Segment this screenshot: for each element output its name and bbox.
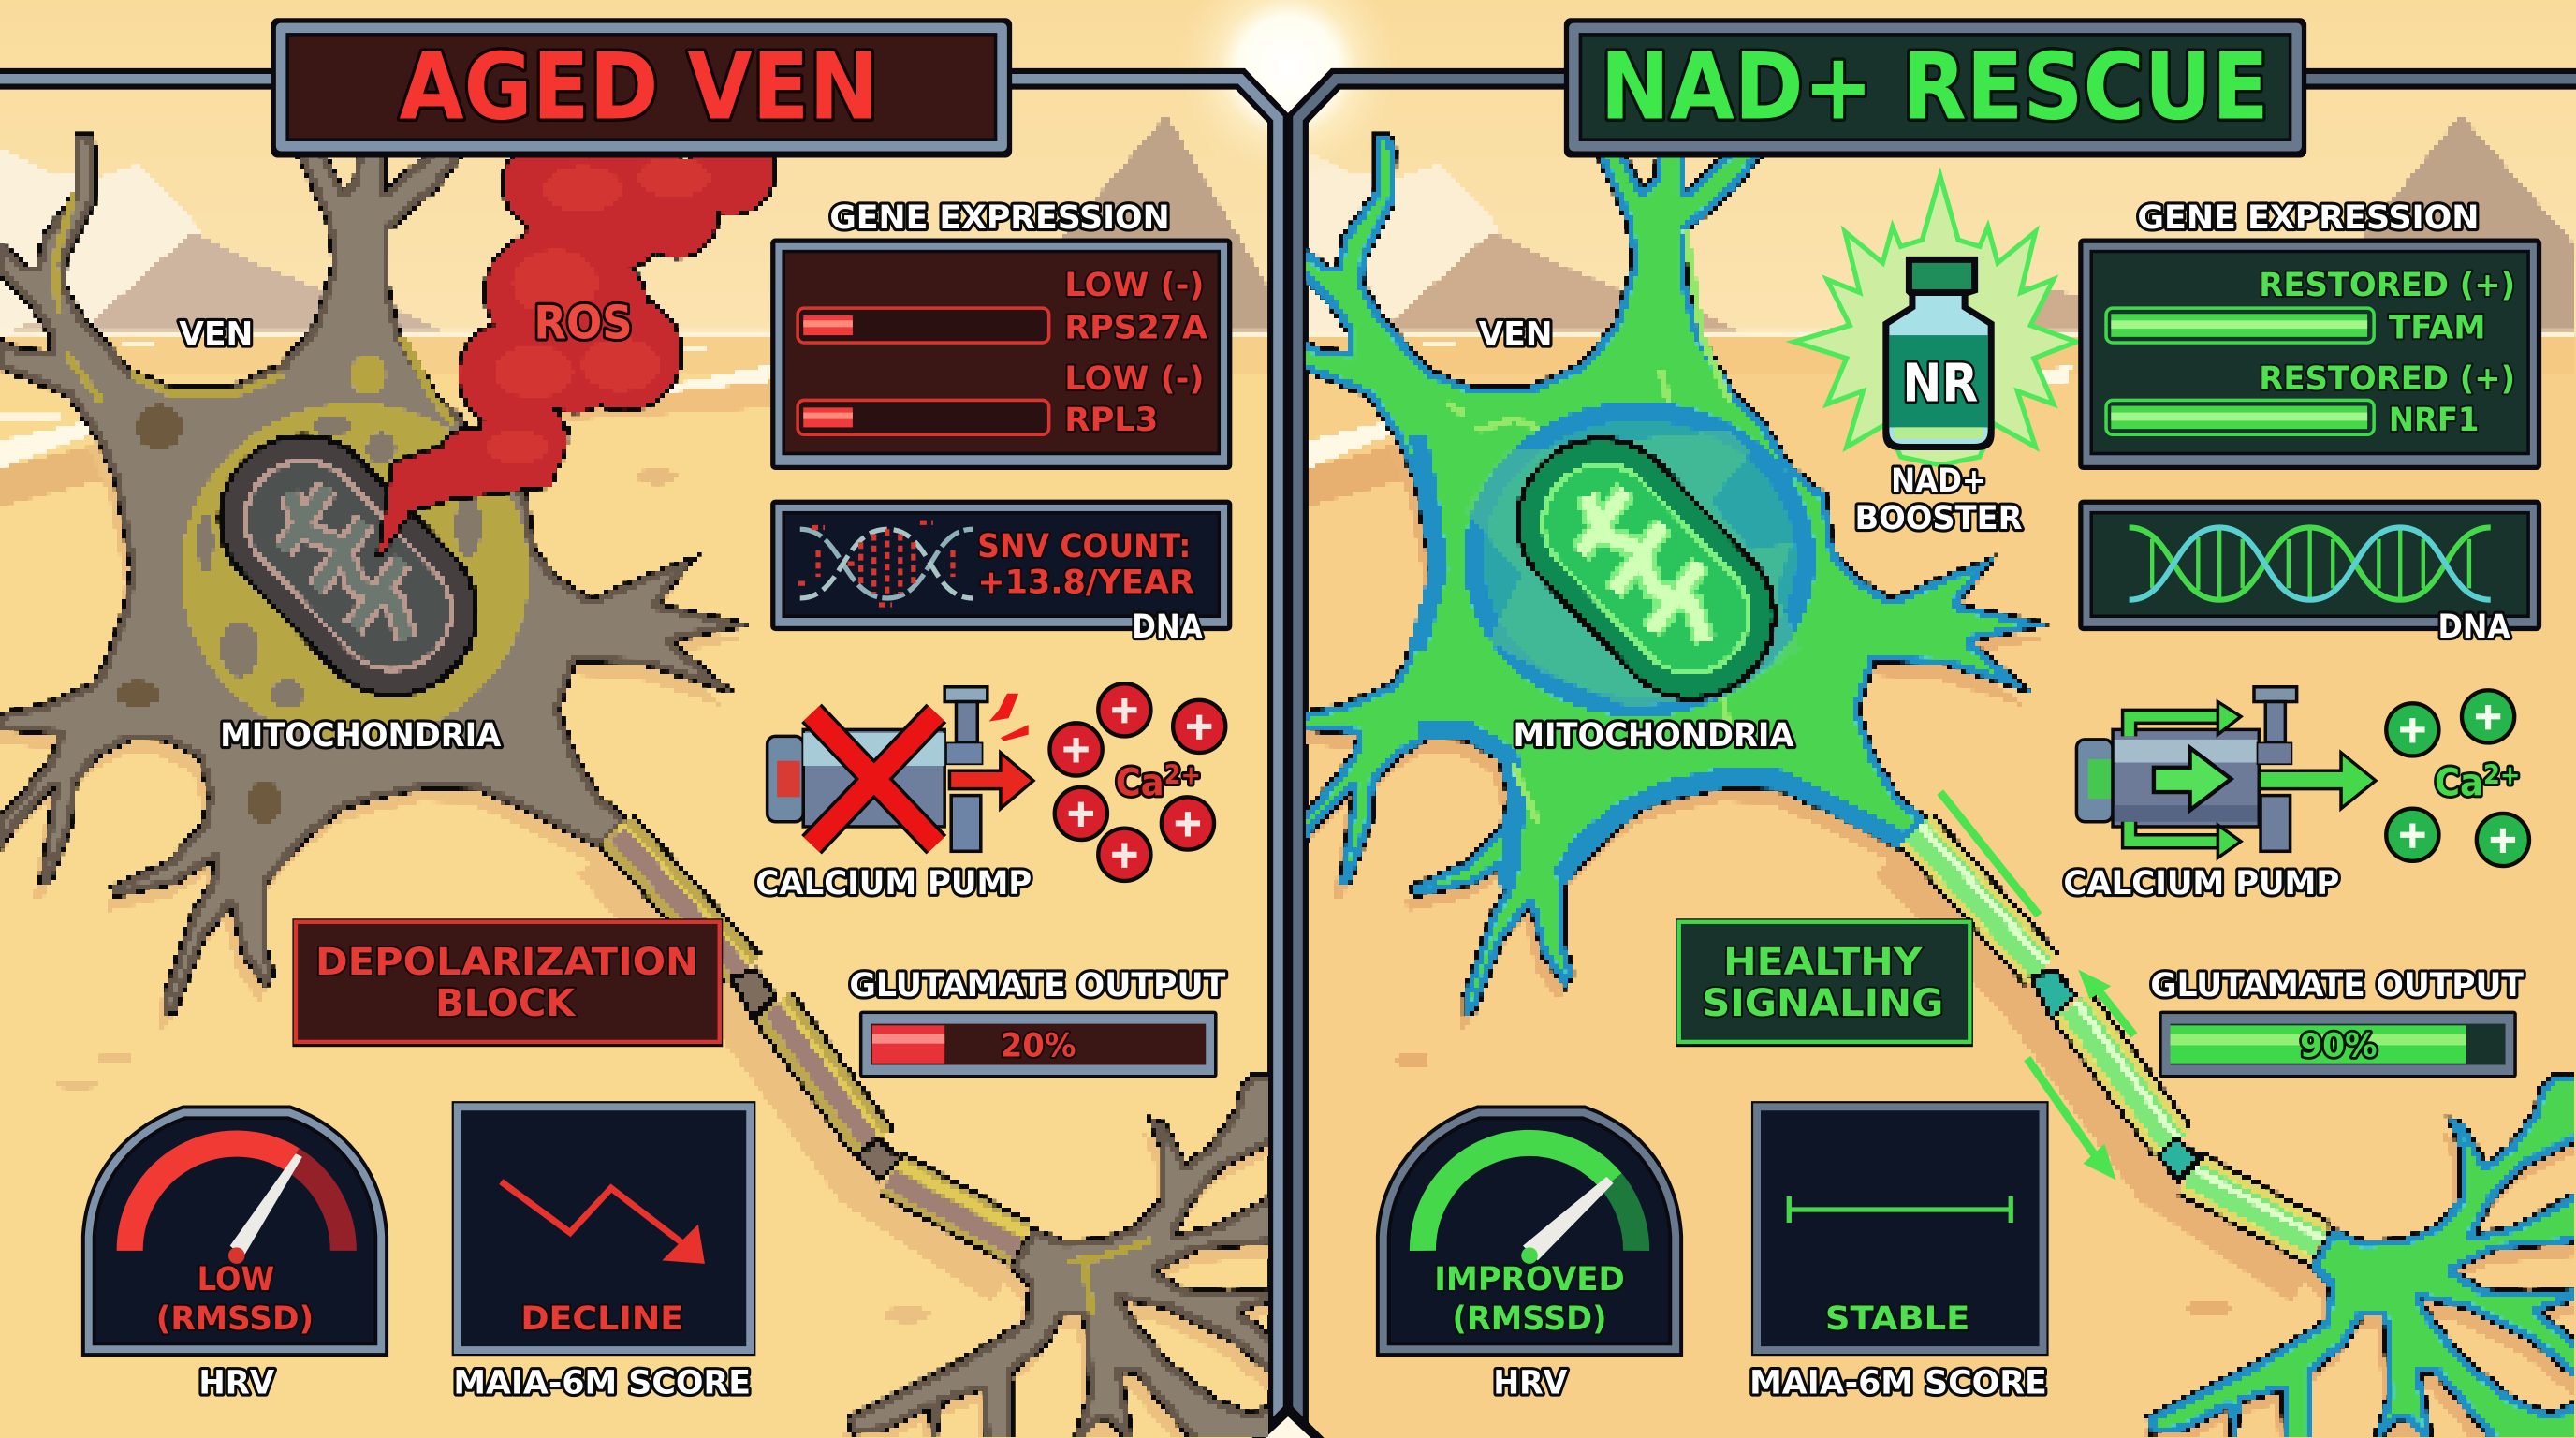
heading: gene expression (right): GENE EXPRESSION — [2137, 198, 2479, 237]
panel: DNA damage — [770, 500, 1232, 631]
gene row: TFAM: RESTORED (+) — [2259, 266, 2515, 304]
panel: MAIA-6M stable chart — [1755, 1106, 2044, 1352]
neuron: rescued VEN (green and blue, healthy) — [1293, 136, 2576, 1438]
label: VEN (left): VEN — [179, 315, 253, 354]
callout: healthy signaling — [1676, 918, 1973, 1047]
gauge: HRV improved — [1383, 1112, 1676, 1349]
callout: depolarization block — [292, 918, 723, 1047]
callout: depolarization block: BLOCK — [435, 981, 577, 1025]
neuron: aged VEN (grey-brown, degraded) — [0, 136, 1290, 1438]
label: ROS: ROS — [534, 296, 633, 350]
gene row: NRF1 — [2106, 360, 2515, 439]
gene row: RPS27A: LOW (-) — [1064, 266, 1204, 304]
icon: blocked calcium pump — [768, 687, 1033, 851]
callout: depolarization block: DEPOLARIZATION — [315, 940, 698, 984]
callout: healthy signaling: SIGNALING — [1702, 981, 1943, 1025]
gene row: TFAM: TFAM — [2389, 309, 2485, 347]
panel: DNA damage: +13.8/YEAR — [977, 564, 1194, 602]
label: MAIA-6M score (right): MAIA-6M SCORE — [1749, 1364, 2047, 1402]
label: mitochondria (right): MITOCHONDRIA — [1513, 716, 1794, 755]
title: AGED VEN — [271, 18, 1012, 158]
gene row: RPL3 — [798, 360, 1204, 439]
icon: working calcium pump — [2076, 687, 2376, 858]
signal arrows along rescued axon — [1940, 792, 2134, 1180]
heading: glutamate output (left): GLUTAMATE OUTPUT — [849, 966, 1225, 1005]
gauge: HRV low — [89, 1112, 381, 1349]
gauge: HRV low: (RMSSD) — [156, 1299, 314, 1338]
bar: glutamate 20%: 20% — [1001, 1027, 1076, 1065]
label: MAIA-6M score (left): MAIA-6M SCORE — [453, 1364, 751, 1402]
gauge: HRV improved: (RMSSD) — [1453, 1299, 1606, 1338]
gene row: RPS27A: RPS27A — [1064, 309, 1208, 347]
label: HRV (right): HRV — [1493, 1364, 1567, 1402]
bar: glutamate 90%: 90% — [2300, 1027, 2378, 1065]
ROS cloud plume — [379, 128, 774, 555]
label: calcium pump (right): CALCIUM PUMP — [2063, 864, 2339, 902]
label: Ca2+ (right): 2+ — [2483, 759, 2520, 790]
gene row: NRF1: NRF1 — [2389, 401, 2479, 439]
label: NAD+ booster: BOOSTER — [1855, 499, 2023, 537]
icon: broken DNA helix — [798, 522, 973, 605]
heading: gene expression (left): GENE EXPRESSION — [829, 198, 1170, 237]
label: NAD+ booster — [1855, 462, 2023, 537]
panel: MAIA-6M decline chart: DECLINE — [520, 1299, 683, 1338]
gene row: RPS27A — [798, 266, 1208, 347]
gene row: TFAM — [2106, 266, 2515, 347]
label: DNA (left): DNA — [1132, 608, 1203, 646]
label: HRV (left): HRV — [198, 1364, 274, 1402]
icon: healthy DNA helix — [2130, 527, 2491, 600]
panel: MAIA-6M decline chart — [456, 1106, 752, 1352]
calcium ions: green cluster — [2386, 690, 2529, 866]
bar: glutamate 20% — [859, 1011, 1218, 1078]
gene row: RPL3: LOW (-) — [1064, 360, 1204, 398]
gauge: HRV low: LOW — [198, 1260, 274, 1299]
gene row: NRF1: RESTORED (+) — [2259, 360, 2515, 398]
panel: gene expression (right) — [2078, 239, 2541, 470]
label: Ca2+ (left): 2+ — [1164, 759, 1201, 790]
panel: healthy DNA — [2078, 500, 2541, 631]
panel: gene expression (left) — [770, 239, 1232, 470]
label: VEN (right): VEN — [1479, 315, 1553, 354]
heading: glutamate output (right): GLUTAMATE OUTPUT — [2150, 966, 2524, 1005]
label: calcium pump (left): CALCIUM PUMP — [755, 864, 1032, 902]
icon: NR vial with glow — [1794, 176, 2076, 465]
label: NAD+ booster: NAD+ — [1891, 462, 1986, 500]
title: AGED VEN: AGED VEN — [399, 34, 879, 140]
label: Ca2+ (left): Ca — [1116, 761, 1169, 805]
bar: glutamate 90% — [2159, 1011, 2517, 1078]
gene row: RPL3: RPL3 — [1064, 401, 1158, 439]
gauge: HRV improved: IMPROVED — [1434, 1260, 1625, 1299]
label: mitochondria (left): MITOCHONDRIA — [220, 716, 501, 755]
callout: healthy signaling: HEALTHY — [1723, 940, 1923, 984]
label: Ca2+ (right): Ca — [2435, 761, 2488, 805]
panel: MAIA-6M stable chart: STABLE — [1825, 1299, 1969, 1338]
panel: DNA damage: SNV COUNT: — [977, 527, 1191, 565]
title: NAD+ RESCUE: NAD+ RESCUE — [1600, 34, 2269, 140]
label: DNA (right): DNA — [2438, 608, 2510, 646]
calcium ions: red cluster — [1050, 683, 1225, 881]
icon: NR vial with glow: NR — [1902, 353, 1978, 414]
